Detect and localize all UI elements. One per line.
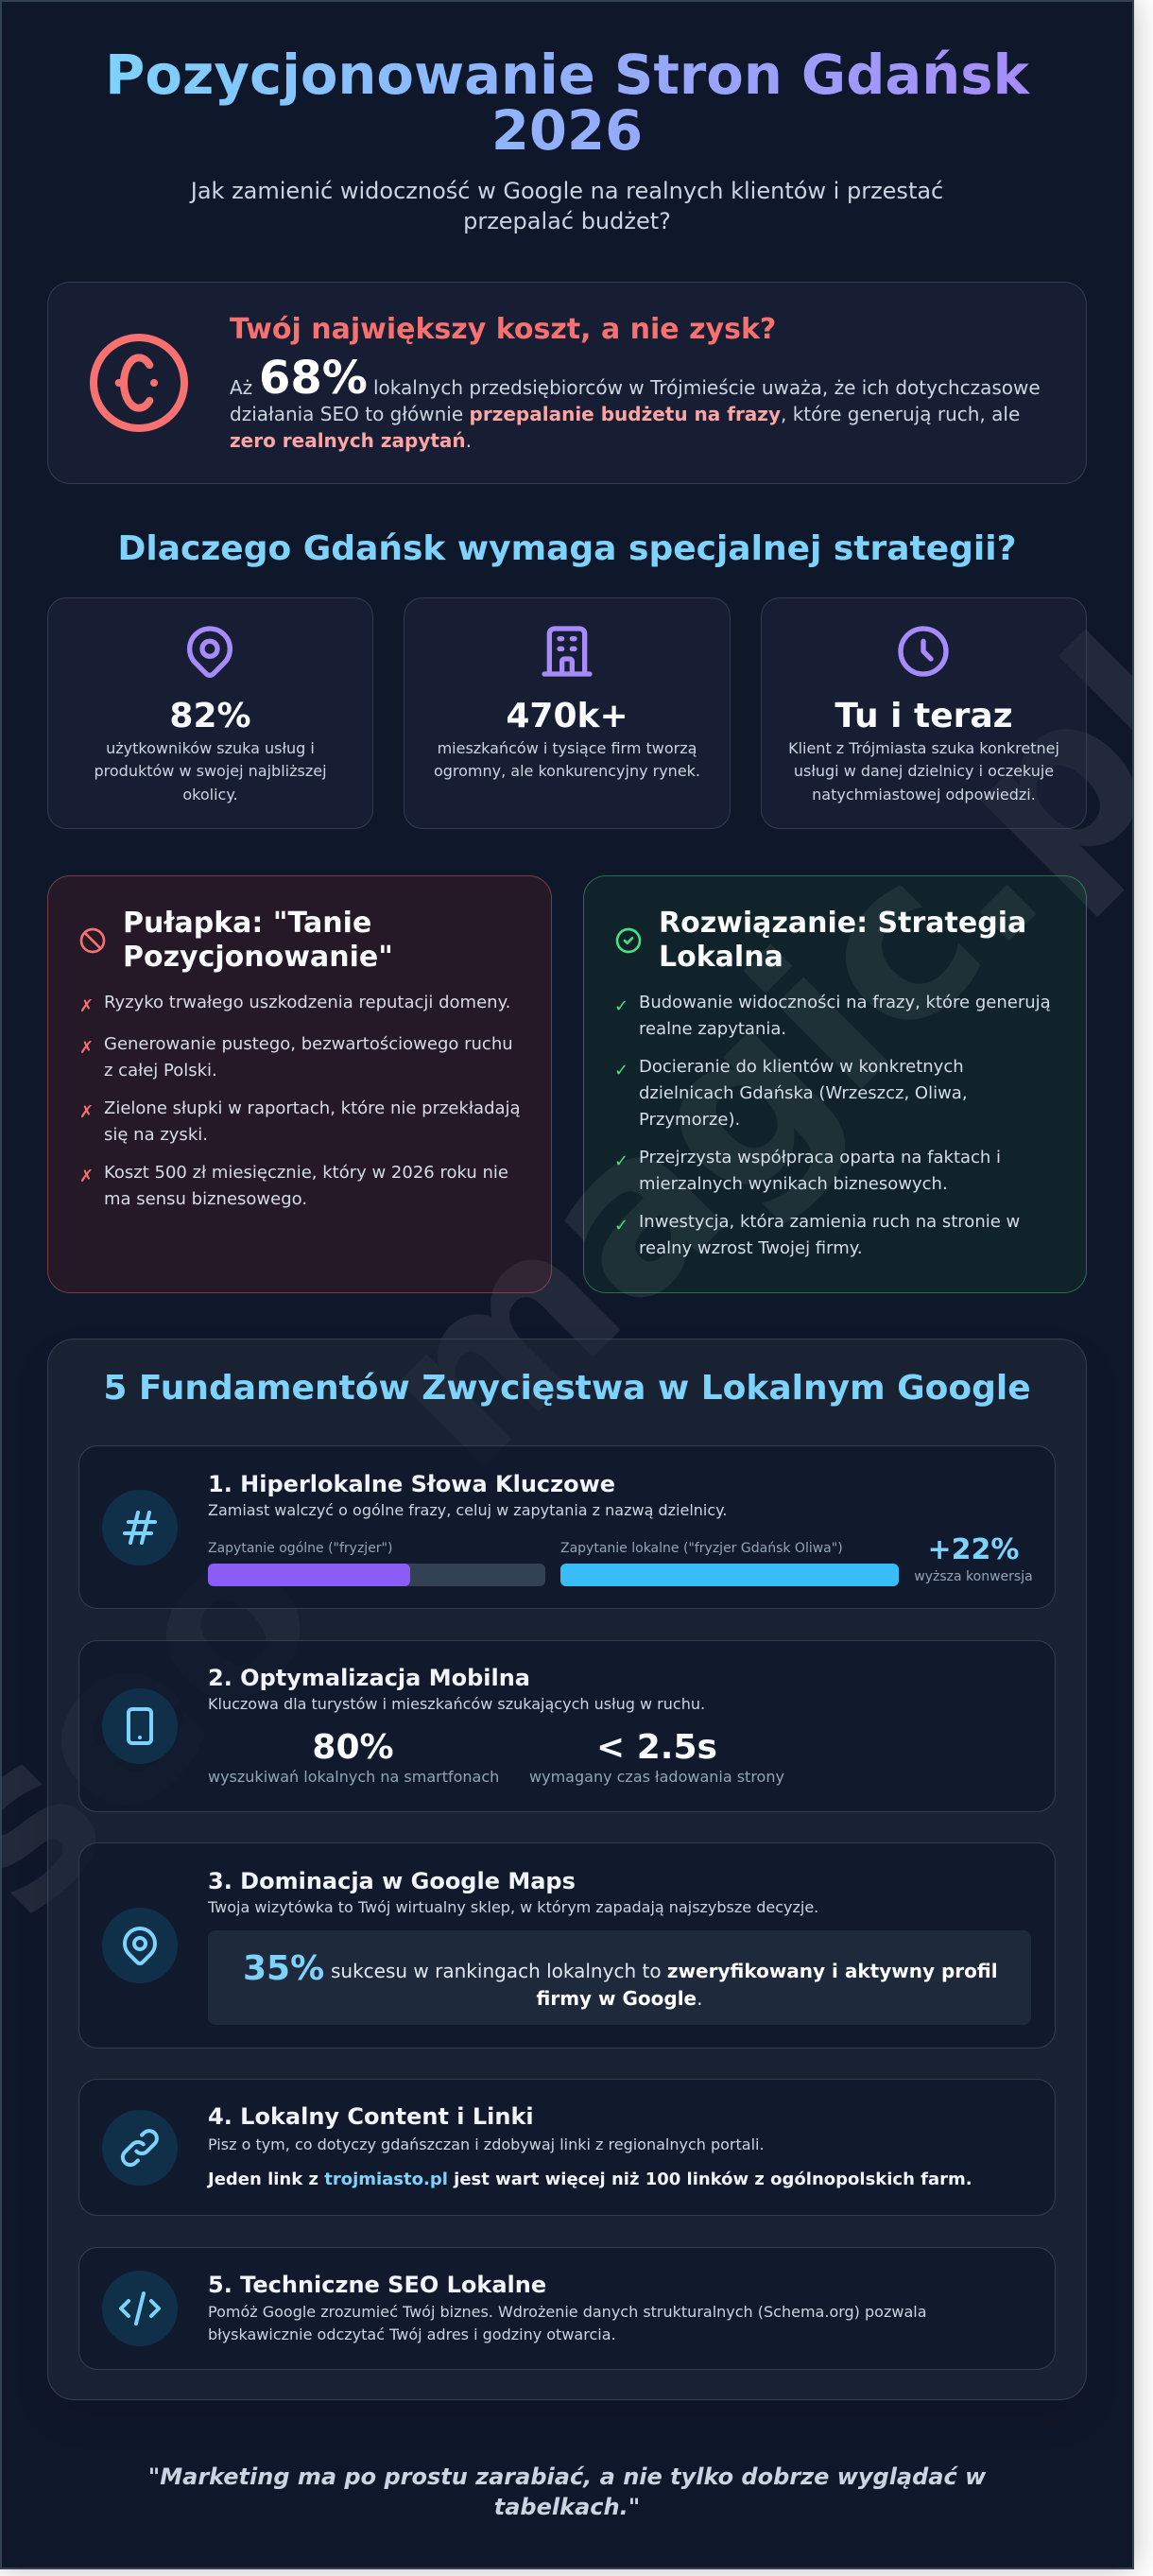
solution heading bbox=[659, 907, 1026, 974]
hero body text continued bbox=[230, 403, 1020, 452]
panel: stat 470k+ bbox=[404, 597, 731, 829]
card 1 heading: 1. Hiperlokalne Słowa Kluczowe bbox=[208, 1471, 615, 1497]
title: Pozycjonowanie Stron Gdańsk bbox=[105, 43, 1029, 107]
icon: link bbox=[102, 2110, 178, 2186]
stat 80%: 80% bbox=[312, 1728, 394, 1767]
card 4 bbox=[78, 2079, 1056, 2216]
icon: mobile bbox=[102, 1688, 178, 1764]
item bbox=[639, 1057, 968, 1130]
item bbox=[104, 1098, 521, 1145]
item bbox=[639, 1212, 1020, 1258]
bar label general: Zapytanie ogólne ("fryzjer") bbox=[208, 1541, 392, 1556]
bar general bbox=[208, 1564, 545, 1586]
icon: check circle bbox=[616, 928, 641, 953]
card 4 heading: 4. Lokalny Content i Linki bbox=[208, 2103, 534, 2130]
stat 2.5s label: wymagany czas ładowania strony bbox=[529, 1768, 784, 1786]
stat description: Klient z Trójmiasta szuka konkretnej bbox=[788, 739, 1059, 757]
stat value: Tu i teraz bbox=[835, 697, 1013, 735]
card 1 text: Zamiast walczyć o ogólne frazy, celuj w zapytania z nazwą dzielnicy. bbox=[208, 1501, 727, 1519]
item: Zielone słupki w raportach, które nie przekładają bbox=[104, 1098, 521, 1118]
card 4 highlight: Jeden link z trojmiasto.pl jest wart więcej niż 100 linków z ogólnopolskich farm. bbox=[208, 2170, 972, 2189]
solution heading: Rozwiązanie: Strategia bbox=[659, 907, 1026, 940]
item: Generowanie pustego, bezwartościowego ruchu bbox=[104, 1034, 513, 1054]
mark: ✗ bbox=[79, 1102, 94, 1122]
trap heading bbox=[123, 907, 393, 974]
card 4 text: Pisz o tym, co dotyczy gdańszczan i zdobywaj linki z regionalnych portali. bbox=[208, 2135, 765, 2153]
stat description: natychmiastowej odpowiedzi. bbox=[812, 786, 1036, 804]
bar fill general bbox=[208, 1564, 410, 1586]
card 5 bbox=[78, 2247, 1056, 2370]
hero text: Aż bbox=[230, 376, 252, 399]
stat description bbox=[434, 739, 700, 780]
subtitle: Jak zamienić widoczność w Google na realnych klientów i przestać bbox=[191, 178, 943, 204]
stat description bbox=[94, 739, 327, 804]
card 1 bbox=[78, 1445, 1056, 1609]
card 2 text: Kluczowa dla turystów i mieszkańców szukających usług w ruchu. bbox=[208, 1695, 705, 1713]
panel: hero cost bbox=[47, 282, 1087, 484]
icon: location pin bbox=[187, 626, 232, 678]
heading: why Gdańsk: Dlaczego Gdańsk wymaga specjalnej strategii? bbox=[117, 529, 1017, 568]
icon: code bbox=[102, 2271, 178, 2346]
trap list bbox=[79, 993, 521, 1209]
card 2 bbox=[78, 1640, 1056, 1812]
card 5 text bbox=[208, 2303, 926, 2343]
card 3 text: Twoja wizytówka to Twój wirtualny sklep, w którym zapadają najszybsze decyzje. bbox=[208, 1898, 818, 1916]
stat description: usługi w danej dzielnicy i oczekuje bbox=[794, 762, 1054, 780]
subtitle bbox=[189, 178, 943, 234]
callout stat: 35% bbox=[243, 1949, 324, 1988]
title: 2026 bbox=[491, 99, 643, 163]
hero body text continued: działania SEO to głównie przepalanie budżetu na frazy, które generują ruch, ale bbox=[230, 403, 1020, 425]
conversion label: wyższa konwersja bbox=[914, 1569, 1033, 1584]
bar local bbox=[560, 1564, 899, 1586]
hero body text: lokalnych przedsiębiorców w Trójmieście uważa, że ich dotychczasowe bbox=[373, 376, 1041, 399]
panel: stat 82% bbox=[47, 597, 373, 829]
item: dzielnicach Gdańska (Wrzeszcz, Oliwa, bbox=[639, 1083, 968, 1103]
item: realny wzrost Twojej firmy. bbox=[639, 1238, 863, 1258]
icon: currency circle bbox=[90, 334, 188, 432]
panel: trap bbox=[47, 875, 552, 1293]
mark: ✗ bbox=[79, 1167, 94, 1186]
item: Budowanie widoczności na frazy, które generują bbox=[639, 993, 1051, 1012]
stat description: okolicy. bbox=[182, 786, 238, 804]
trap heading: Pozycjonowanie" bbox=[123, 941, 393, 974]
item: Przymorze). bbox=[639, 1110, 740, 1130]
closing quote bbox=[148, 2464, 987, 2520]
mark: ✓ bbox=[614, 996, 628, 1016]
item: z całej Polski. bbox=[104, 1061, 217, 1081]
item bbox=[104, 1034, 513, 1081]
heading: five foundations: 5 Fundamentów Zwycięstwa w Lokalnym Google bbox=[103, 1369, 1031, 1408]
icon: building bbox=[542, 626, 593, 677]
stat description: użytkowników szuka usług i bbox=[106, 739, 315, 757]
conversion value: +22% bbox=[928, 1533, 1019, 1566]
item bbox=[639, 1148, 1001, 1194]
item: Inwestycja, która zamienia ruch na stronie w bbox=[639, 1212, 1020, 1232]
stat 80% label: wyszukiwań lokalnych na smartfonach bbox=[208, 1768, 499, 1786]
callout box bbox=[208, 1930, 1031, 2025]
hero stat 68%: 68% bbox=[259, 352, 368, 405]
stat 2.5s: < 2.5s bbox=[596, 1728, 717, 1767]
stat value: 470k+ bbox=[506, 697, 628, 735]
mark: ✓ bbox=[614, 1061, 628, 1081]
trap heading: Pułapka: "Tanie bbox=[123, 907, 371, 940]
solution list bbox=[614, 993, 1051, 1258]
item: mierzalnych wynikach biznesowych. bbox=[639, 1174, 948, 1194]
icon: pin bbox=[102, 1908, 178, 1983]
card 5 heading: 5. Techniczne SEO Lokalne bbox=[208, 2272, 546, 2298]
card 5 text: Pomóż Google zrozumieć Twój biznes. Wdrożenie danych strukturalnych (Schema.org) pozwala bbox=[208, 2303, 926, 2321]
card 5 text: błyskawicznie odczytać Twój adres i godziny otwarcia. bbox=[208, 2325, 616, 2343]
bar label local: Zapytanie lokalne ("fryzjer Gdańsk Oliwa") bbox=[560, 1541, 843, 1556]
item: Przejrzysta współpraca oparta na faktach i bbox=[639, 1148, 1001, 1167]
card 2 heading: 2. Optymalizacja Mobilna bbox=[208, 1665, 530, 1691]
item: się na zyski. bbox=[104, 1125, 208, 1145]
closing quote: "Marketing ma po prostu zarabiać, a nie tylko dobrze wyglądać w bbox=[148, 2464, 986, 2490]
icon: ban bbox=[79, 928, 106, 953]
item: Koszt 500 zł miesięcznie, który w 2026 roku nie bbox=[104, 1163, 508, 1183]
card 3 bbox=[78, 1842, 1056, 2049]
item bbox=[104, 1163, 508, 1209]
icon: clock bbox=[898, 626, 949, 677]
panel: solution bbox=[583, 875, 1087, 1293]
card 3 heading: 3. Dominacja w Google Maps bbox=[208, 1868, 576, 1894]
hero body text continued: zero realnych zapytań. bbox=[230, 429, 472, 452]
stat value: 82% bbox=[169, 697, 251, 735]
item: Ryzyko trwałego uszkodzenia reputacji domeny. bbox=[104, 993, 510, 1012]
callout text end: firmy w Google. bbox=[537, 1987, 702, 2010]
closing quote: tabelkach." bbox=[494, 2494, 640, 2520]
icon: hash bbox=[102, 1490, 178, 1565]
item: ma sensu biznesowego. bbox=[104, 1189, 307, 1209]
solution heading: Lokalna bbox=[659, 941, 783, 974]
subtitle: przepalać budżet? bbox=[463, 208, 671, 234]
item bbox=[639, 993, 1051, 1039]
stat description: produktów w swojej najbliższej bbox=[94, 762, 327, 780]
item: Docieranie do klientów w konkretnych bbox=[639, 1057, 964, 1077]
callout text: sukcesu w rankingach lokalnych to zweryfikowany i aktywny profil bbox=[331, 1960, 998, 1982]
title bbox=[95, 47, 1040, 163]
mark: ✗ bbox=[79, 1038, 94, 1058]
stat description: mieszkańców i tysiące firm tworzą bbox=[438, 739, 697, 757]
mark: ✗ bbox=[79, 996, 94, 1016]
panel: stat now bbox=[761, 597, 1087, 829]
item: realne zapytania. bbox=[639, 1019, 786, 1039]
panel: five foundations bbox=[47, 1339, 1087, 2400]
mark: ✓ bbox=[614, 1151, 628, 1171]
stat description: ogromny, ale konkurencyjny rynek. bbox=[434, 762, 700, 780]
hero heading: Twój największy koszt, a nie zysk? bbox=[230, 313, 776, 346]
stat description bbox=[788, 739, 1059, 804]
mark: ✓ bbox=[614, 1216, 628, 1236]
